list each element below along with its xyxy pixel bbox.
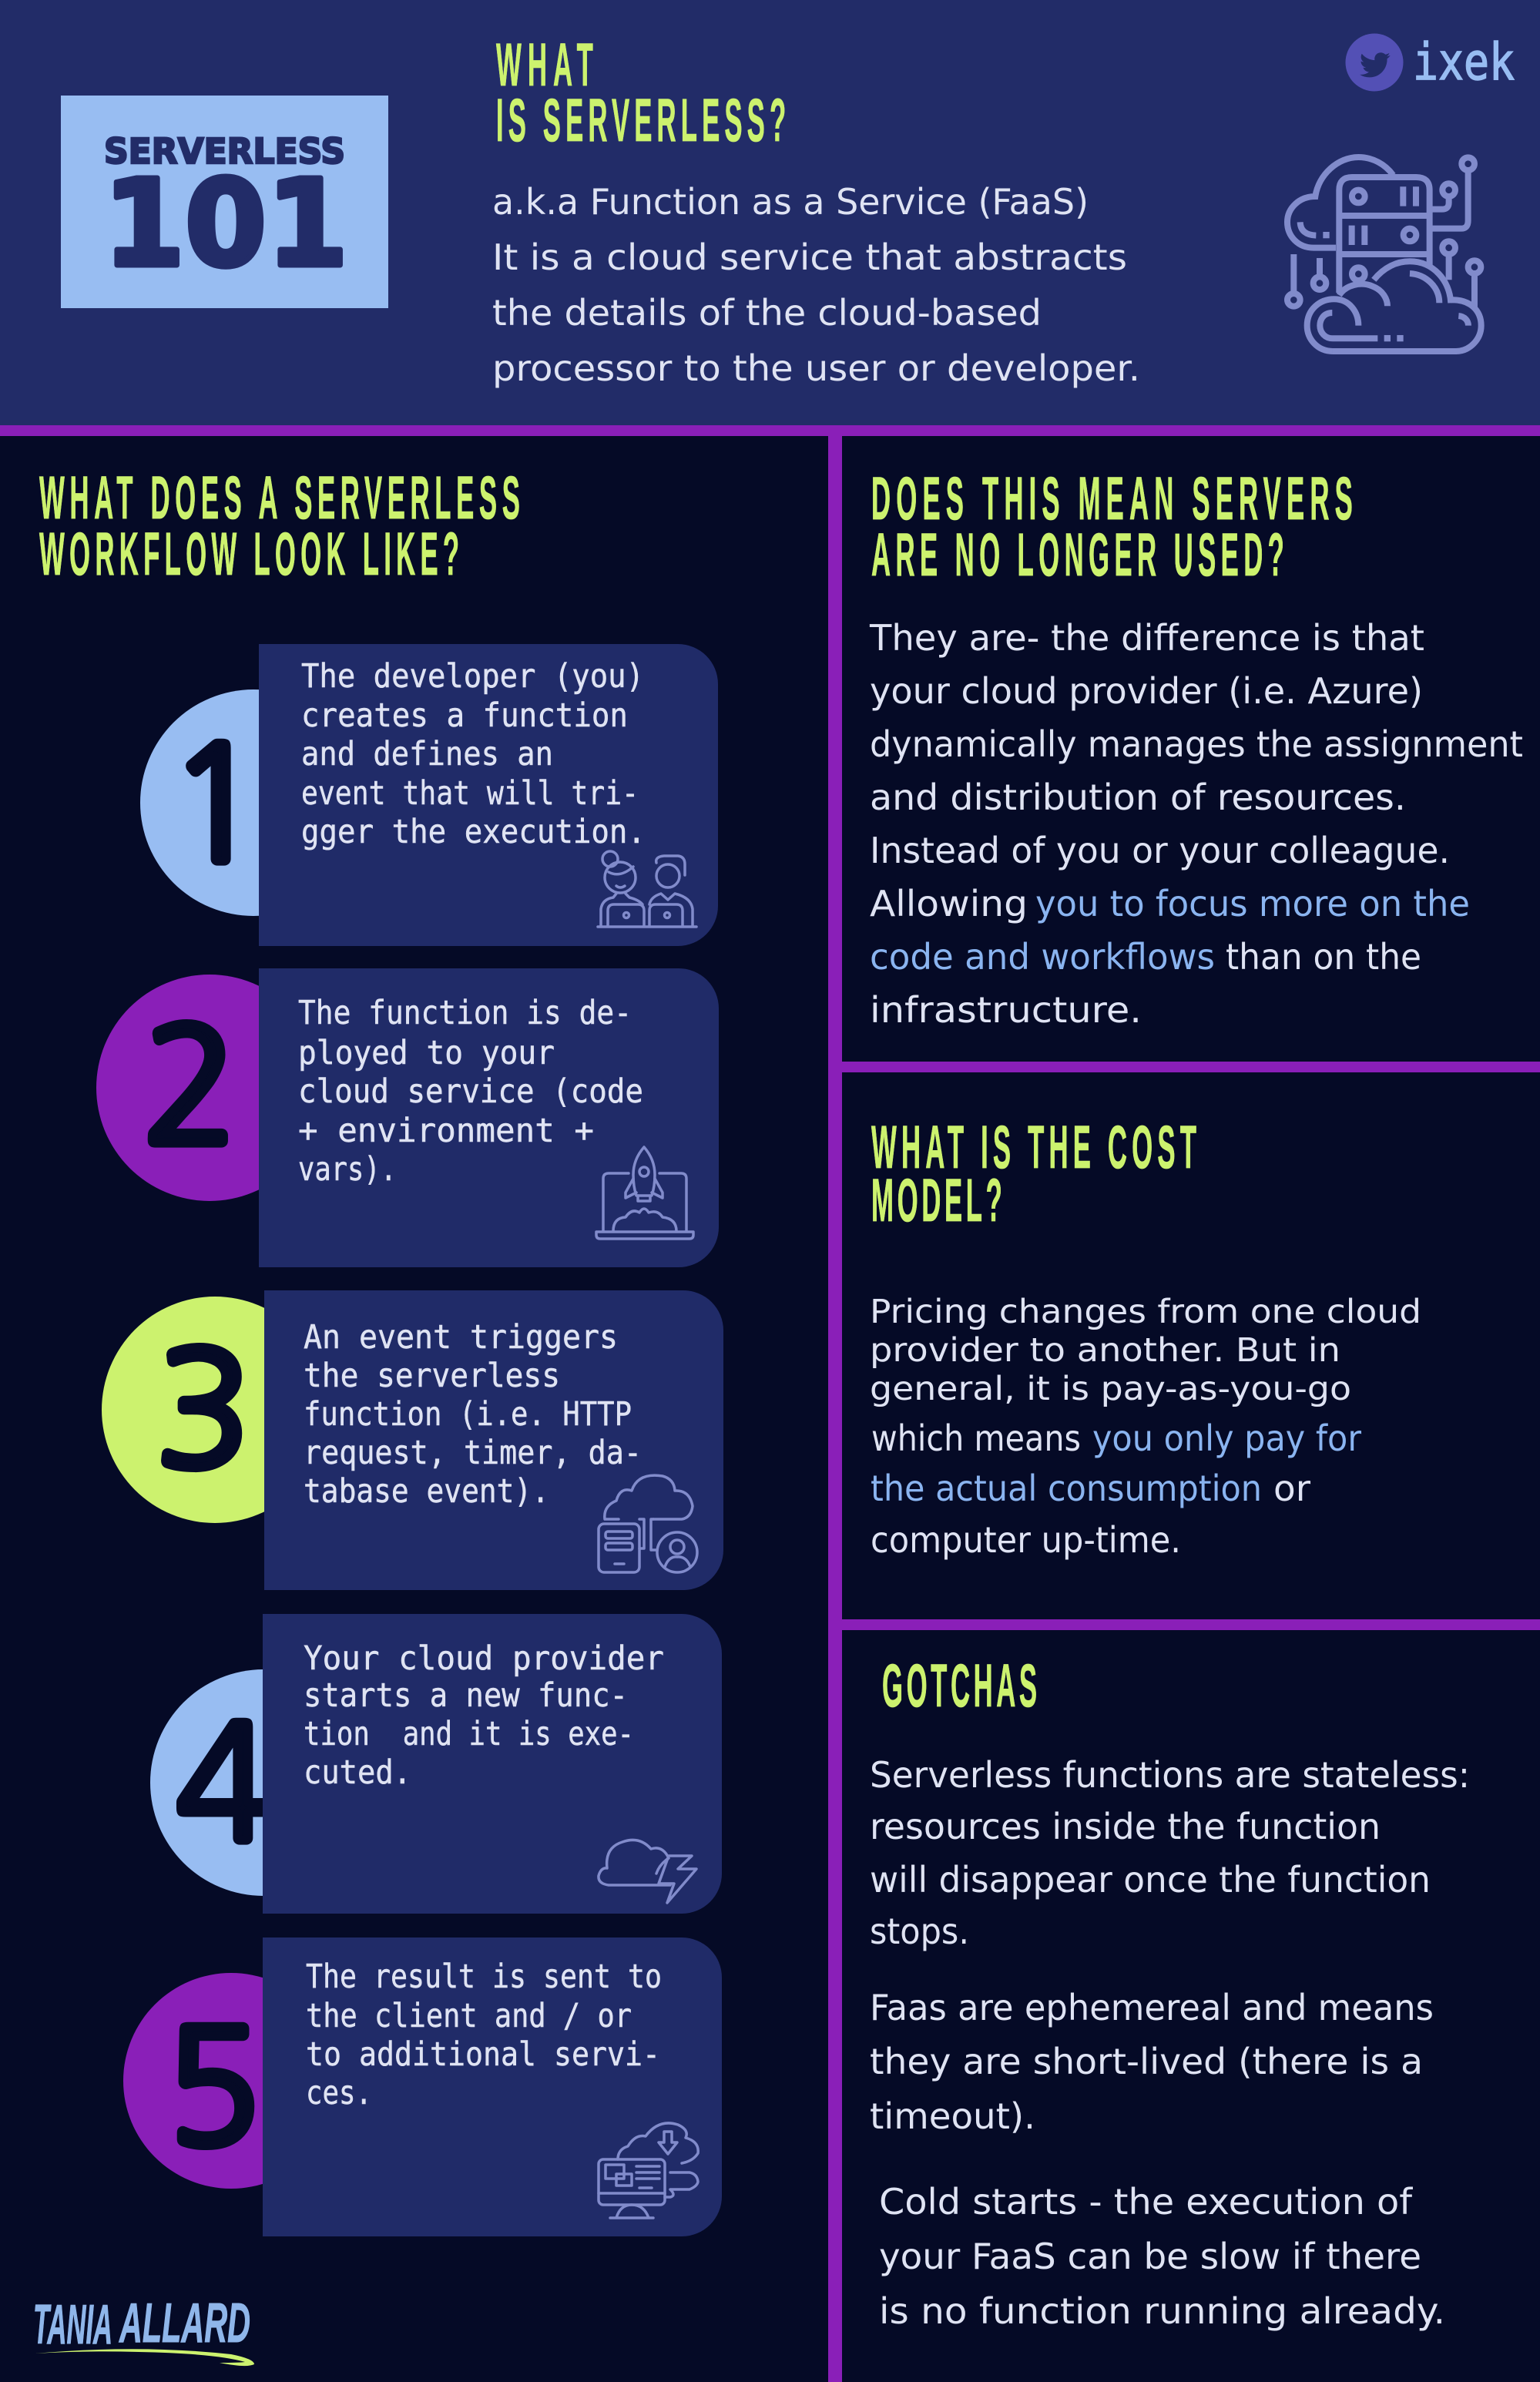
step 5 [123,1937,722,2236]
text: servers answer: Instead of you or your colleague. [870,830,1450,871]
number circle 3 [102,1297,328,1523]
card 1 text: creates a function [301,696,628,735]
card 3 text: An event triggers [304,1318,618,1357]
icon: cloud server user [599,1475,697,1572]
step 2 [96,968,719,1267]
step 4 [150,1614,722,1914]
number circle 3: 3 [156,1331,251,1489]
heading: workflow [39,464,520,588]
text: cost answer [870,1293,1421,1561]
heading: cost: WHAT IS THE COST [871,1113,1196,1181]
text: definition of serverless: It is a cloud service that abstracts [492,237,1127,278]
text: cost answer: which means [871,1417,1081,1459]
badge: Serverless 101: 101 [103,154,348,294]
text: cold starts [879,2181,1445,2332]
card 5 text [306,1958,662,2112]
card 1 text [301,657,646,851]
card 3 [264,1290,723,1590]
text: definition of serverless: a.k.a Function as a Service (FaaS) [492,181,1089,223]
twitter handle [1345,32,1515,92]
card 4 text: cuted. [304,1753,411,1792]
card 5 text: the client and / or [306,1997,632,2035]
card 2 text: + environment + [298,1112,594,1150]
badge: Serverless 101: SERVERLESS [104,131,345,172]
heading: gotchas: GOTCHAS [882,1652,1037,1719]
signature: Tania Allard: ALLARD [119,2293,250,2354]
badge: Serverless 101 [61,96,388,308]
number circle 4 [150,1669,377,1896]
text: cost answer: the actual consumption [871,1468,1262,1509]
text: servers answer: than on the [1226,936,1421,978]
card 2 text: The function is de- [298,994,632,1032]
card 3 text: the serverless [304,1357,560,1395]
card 1 text: gger the execution. [301,813,646,851]
card 4 text: tion and it is exe- [304,1715,634,1753]
card 1 text: and defines an [301,735,553,773]
text: servers answer: you to focus more on the [1035,883,1470,924]
card 3 text: request, timer, da- [304,1434,642,1472]
text: ephemeral: timeout). [870,2095,1035,2137]
card 4 text: starts a new func- [304,1676,628,1715]
heading: servers: DOES THIS MEAN SERVERS [871,465,1353,532]
card 1 text: event that will tri- [301,774,639,813]
card 4 [263,1614,722,1914]
card 3 text: tabase event). [304,1472,549,1511]
card 3 text [304,1318,642,1511]
text: definition of serverless [492,181,1140,389]
twitter handle: ixek [1413,32,1515,92]
text: servers answer: your cloud provider (i.e. Azure) [870,670,1423,712]
text: cold starts: your FaaS can be slow if there [879,2236,1421,2277]
text: stateless: will disappear once the function [870,1859,1431,1901]
signature: Tania Allard: TANIA [33,2294,112,2356]
number circle 4: 4 [176,1705,271,1863]
heading: cost: MODEL? [871,1166,1002,1234]
step 1 [140,644,718,946]
card 5 text: to additional servi- [306,2035,660,2074]
heading: what is serverless: WHAT [496,31,593,99]
card 5 text: ces. [306,2074,372,2112]
heading: cost [871,1113,1196,1234]
heading: servers: ARE NO LONGER USED? [871,521,1284,589]
card 2 text [298,994,643,1189]
text: cost answer: general, it is pay-as-you-go [870,1370,1351,1408]
card 1 text: The developer (you) [301,657,644,696]
panel: cost model [870,1113,1421,1561]
card 5 [263,1937,722,2236]
number circle 2: 2 [143,1008,238,1166]
text: cost answer: computer up-time. [871,1519,1181,1561]
text: servers answer: and distribution of resources. [870,777,1406,818]
card 2 text: cloud service (code [298,1072,643,1111]
text: cost answer: provider to another. But in [870,1331,1340,1370]
heading: servers [871,465,1353,589]
text: ephemeral: Faas are ephemereal and means [870,1987,1434,2028]
text: servers answer: code and workflows [870,936,1215,978]
text: cost answer: Pricing changes from one cloud [870,1293,1421,1331]
text: cost answer: or [1273,1468,1310,1509]
icon: developers [598,851,696,927]
card 2 [259,968,719,1267]
text: definition of serverless: processor to the user or developer. [492,347,1140,389]
card 4 text: Your cloud provider [304,1639,664,1678]
number circle 2 [96,975,323,1201]
heading: workflow: WORKFLOW LOOK LIKE? [39,520,459,588]
card 2 text: vars). [298,1150,397,1189]
text: stateless: Serverless functions are stateless: [870,1754,1470,1796]
card 1 [259,644,718,946]
number circle 1: 1 [168,726,263,884]
number circle 5: 5 [166,2009,261,2167]
heading: what is serverless [496,31,786,154]
text: stateless: stops. [870,1911,969,1952]
signature: Tania Allard [33,2293,254,2366]
text: servers answer: dynamically manages the assignment [870,723,1523,765]
icon: cloud server [1287,157,1481,351]
card 4 text [304,1639,664,1792]
heading: what is serverless: IS SERVERLESS? [496,86,786,154]
text: ephemeral [870,1987,1434,2137]
panel: header [0,0,1540,425]
text: servers answer: Allowing [870,883,1028,924]
card 5 text: The result is sent to [306,1958,662,1996]
number circle 5 [123,1973,339,2189]
panel: are servers still used [869,465,1523,1031]
text: cold starts: is no function running already. [879,2290,1445,2332]
text: ephemeral: they are short-lived (there is a [870,2041,1423,2082]
text: servers answer: infrastructure. [870,989,1142,1031]
text: stateless: resources inside the function [870,1806,1381,1847]
text: definition of serverless: the details of the cloud-based [492,292,1042,334]
icon: cloud and lightning [599,1840,696,1903]
text: servers answer: They are- the difference is that [869,617,1424,659]
text: stateless [870,1754,1470,1952]
heading: workflow: WHAT DOES A SERVERLESS [39,464,520,532]
text: servers answer [869,617,1523,1031]
icon: cloud computer [599,2123,698,2218]
number circle 1 [140,689,367,916]
text: cost answer: you only pay for [1092,1417,1361,1459]
panel: gotchas [870,1652,1470,2332]
card 3 text: function (i.e. HTTP [304,1395,632,1434]
step 3 [102,1290,723,1590]
icon: rocket launch [596,1147,693,1239]
text: cold starts: Cold starts - the execution of [879,2181,1414,2223]
card 2 text: ployed to your [298,1034,555,1072]
